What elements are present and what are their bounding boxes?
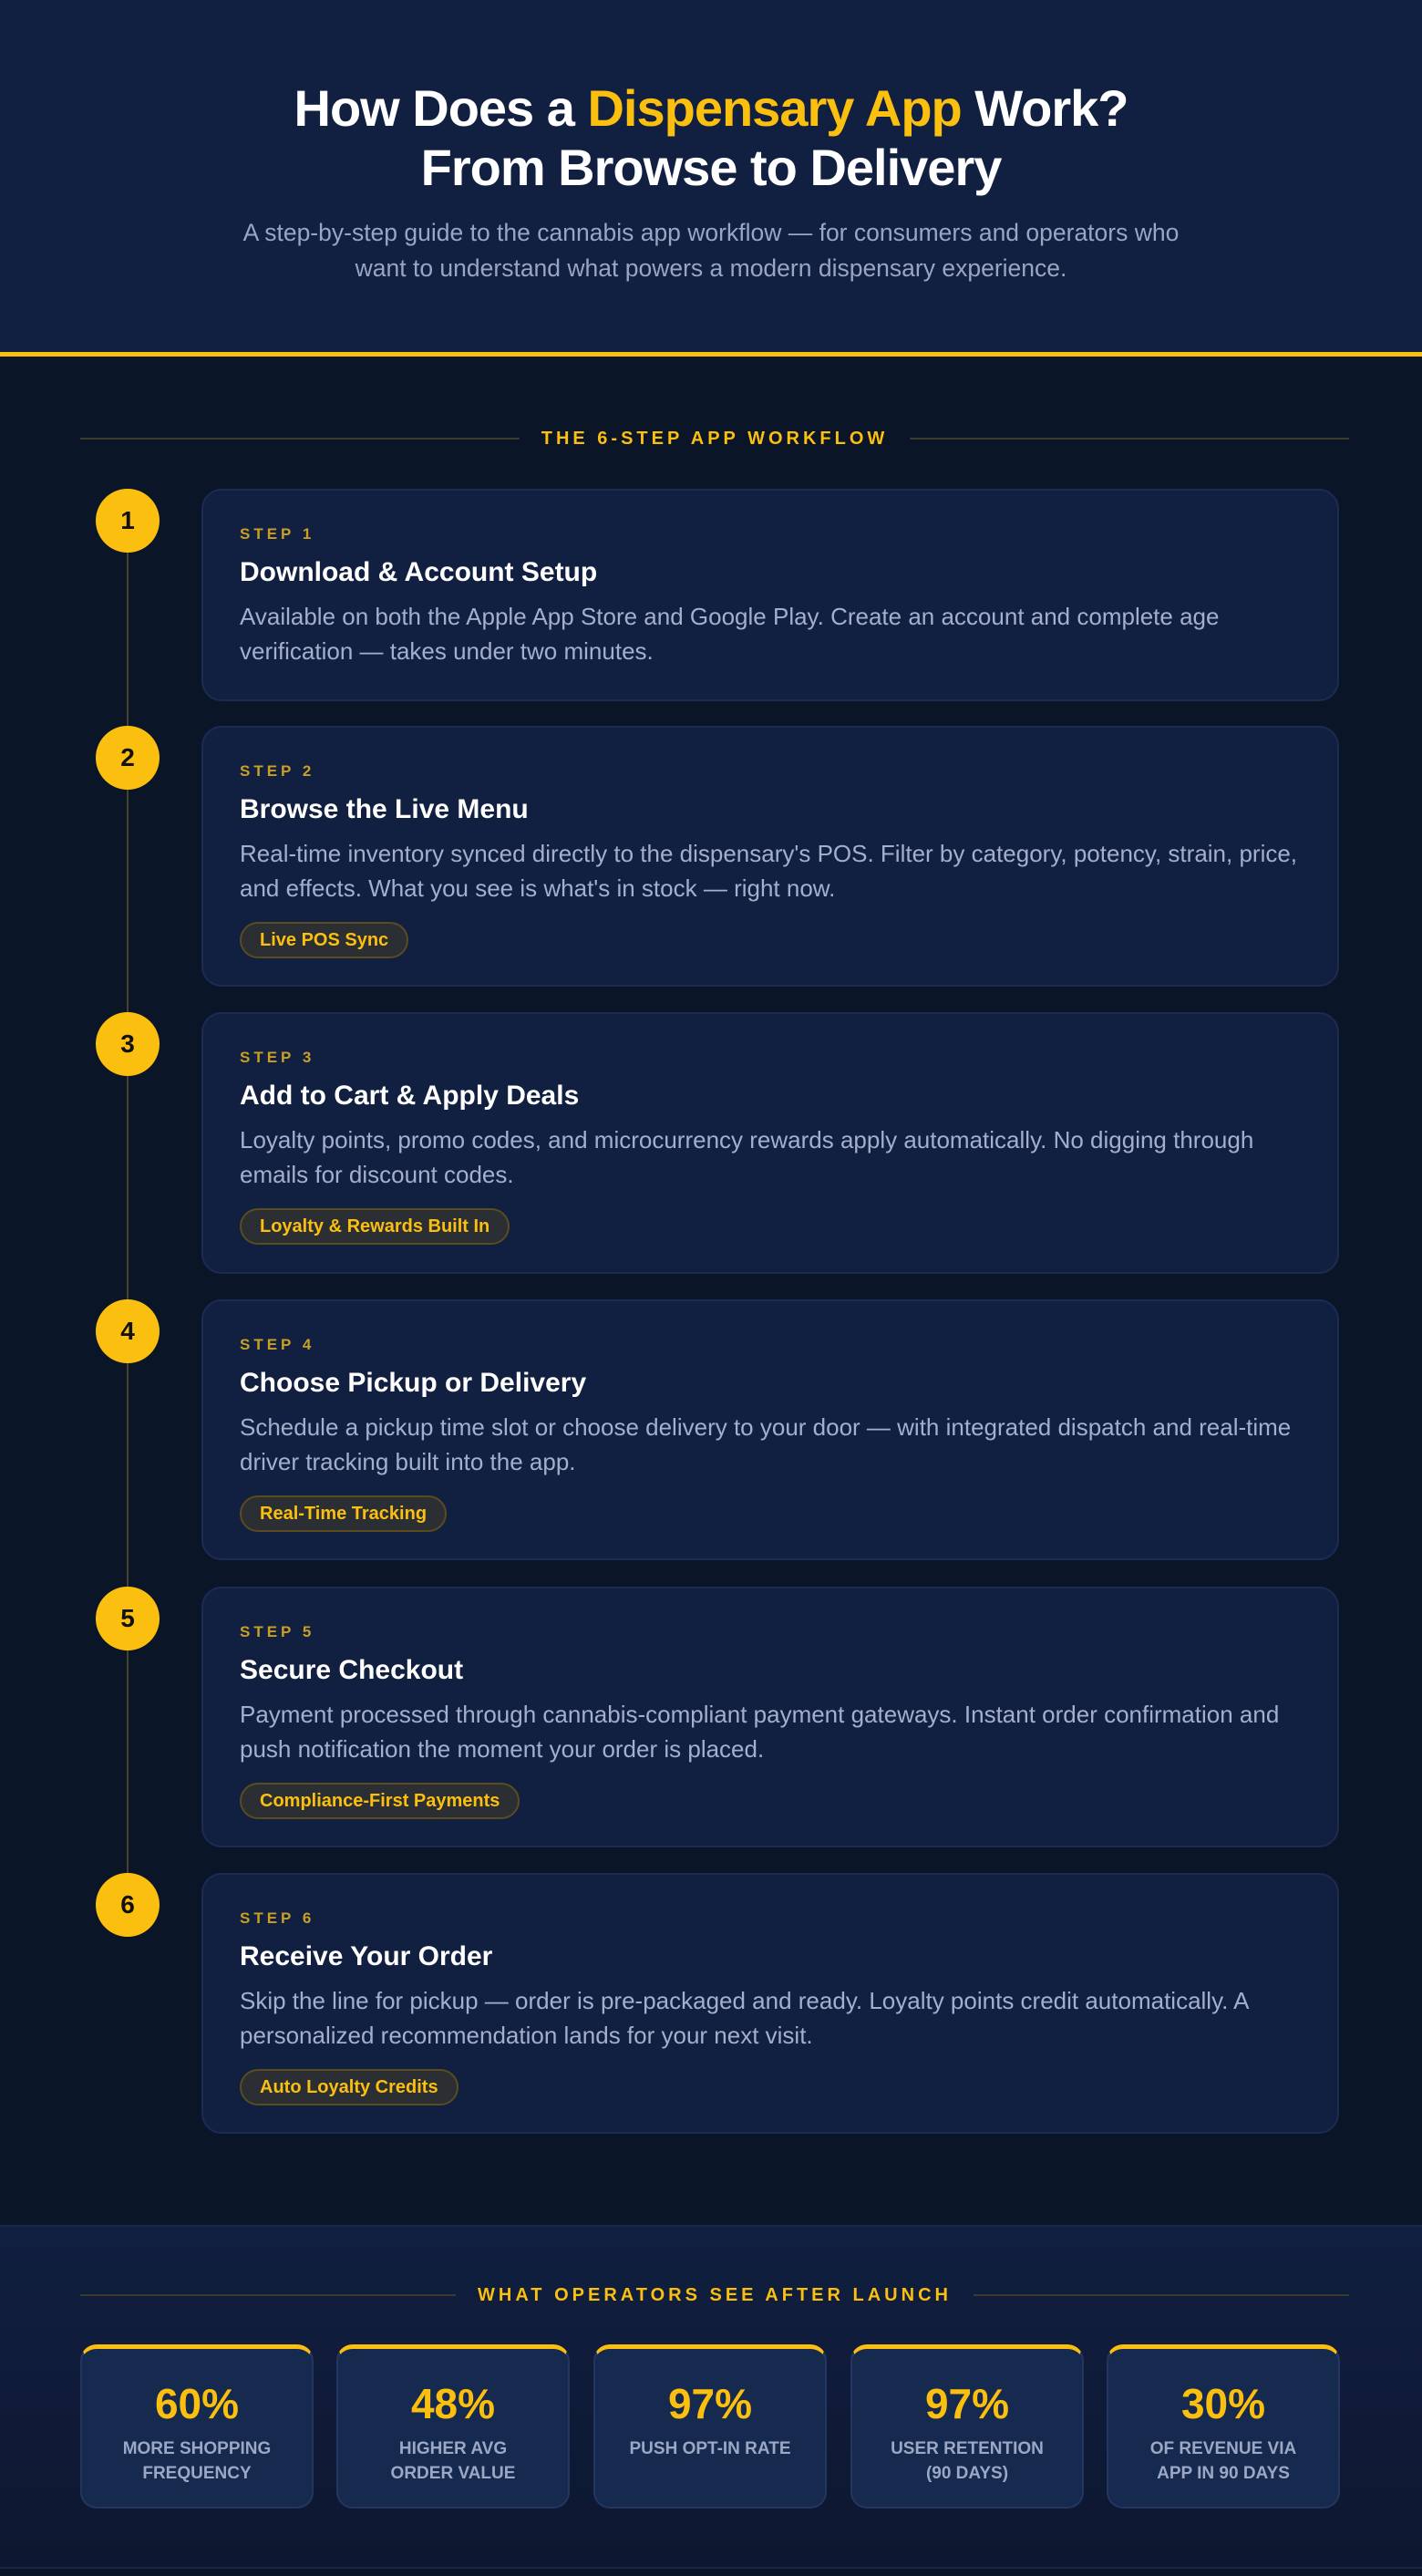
step 2 card: Browse the Live Menu <box>240 794 529 824</box>
stat 1: MORE SHOPPING <box>123 2439 271 2458</box>
step 5 card: STEP 5 <box>240 1623 314 1640</box>
step 2 circle <box>96 726 160 790</box>
section heading: workflow: THE 6-STEP APP WORKFLOW <box>541 429 888 449</box>
step 2 card: STEP 2 <box>240 762 314 780</box>
stats band <box>0 2225 1422 2569</box>
stat 4: USER RETENTION <box>891 2439 1044 2458</box>
step 6 card: Receive Your Order <box>240 1941 492 1971</box>
step 4 card: Schedule a pickup time slot or choose delivery to your door — with integrated dispatch and real-time driver tracking built into the app. <box>240 1413 1291 1475</box>
step 3 card: Loyalty & Rewards Built In <box>260 1216 489 1236</box>
stat 3: 97% <box>668 2380 752 2427</box>
header <box>0 0 1422 357</box>
step 5 card: Payment processed through cannabis-compliant payment gateways. Instant order confirmation and push notification the moment your order is placed. <box>240 1701 1279 1763</box>
step 6 card: Auto Loyalty Credits <box>260 2077 438 2097</box>
stat 5 <box>1107 2344 1340 2509</box>
stat 5: OF REVENUE VIA <box>1150 2439 1296 2458</box>
step 3 card: Loyalty points, promo codes, and microcurrency rewards apply automatically. No digging through emails for discount codes. <box>240 1126 1253 1188</box>
step 2 card: Live POS Sync <box>260 930 388 950</box>
stat 3 <box>593 2344 827 2509</box>
step 2 card <box>201 726 1339 987</box>
stat 5: APP IN 90 DAYS <box>1157 2464 1290 2483</box>
step 2 circle: 2 <box>120 743 135 771</box>
stat 2: HIGHER AVG <box>399 2439 507 2458</box>
title: From Browse to Delivery <box>421 139 1001 196</box>
step 4 card: STEP 4 <box>240 1336 314 1353</box>
step 6 card <box>201 1873 1339 2134</box>
step 5 circle: 5 <box>120 1604 135 1632</box>
step 6 circle: 6 <box>120 1890 135 1919</box>
step 5 card: Secure Checkout <box>240 1655 463 1685</box>
stat 3: PUSH OPT-IN RATE <box>629 2439 791 2458</box>
step 5 card <box>201 1587 1339 1847</box>
step 5 circle <box>96 1587 160 1650</box>
stat 4: (90 DAYS) <box>926 2464 1008 2483</box>
step 3 card: STEP 3 <box>240 1049 314 1066</box>
stat 2: ORDER VALUE <box>391 2464 515 2483</box>
step 3 card <box>201 1012 1339 1274</box>
subtitle <box>242 219 1179 282</box>
step 1 card: Download & Account Setup <box>240 557 597 587</box>
title <box>294 79 1128 196</box>
step 5 card: Compliance-First Payments <box>260 1791 500 1811</box>
step 3 card: Add to Cart & Apply Deals <box>240 1081 579 1111</box>
step 4 circle <box>96 1299 160 1363</box>
stat 5: 30% <box>1181 2380 1265 2427</box>
step 1 card <box>201 489 1339 701</box>
step 3 circle: 3 <box>120 1029 135 1058</box>
step 4 card <box>201 1299 1339 1560</box>
step 6 card: STEP 6 <box>240 1909 314 1927</box>
stat 2 <box>336 2344 570 2509</box>
stat 4 <box>850 2344 1084 2509</box>
subtitle: want to understand what powers a modern dispensary experience. <box>356 254 1066 282</box>
step 4 card: Real-Time Tracking <box>260 1504 427 1524</box>
step 1 circle <box>96 489 160 553</box>
stat 1: 60% <box>155 2380 239 2427</box>
step 4 card: Choose Pickup or Delivery <box>240 1368 586 1398</box>
stat 1 <box>80 2344 314 2509</box>
section heading: results: WHAT OPERATORS SEE AFTER LAUNCH <box>478 2285 952 2305</box>
stat 1: FREQUENCY <box>142 2464 252 2483</box>
step 1 circle: 1 <box>120 506 135 534</box>
step 2 card: Real-time inventory synced directly to the dispensary's POS. Filter by category, potency, strain, price, and effects. What you see is what's in stock — right now. <box>240 840 1297 902</box>
timeline line <box>127 553 129 1875</box>
step 1 card: STEP 1 <box>240 525 314 543</box>
step 4 circle: 4 <box>120 1317 135 1345</box>
stat 4: 97% <box>925 2380 1009 2427</box>
subtitle: A step-by-step guide to the cannabis app workflow — for consumers and operators who <box>243 219 1179 246</box>
step 3 circle <box>96 1012 160 1076</box>
stat 2: 48% <box>411 2380 495 2427</box>
step 6 circle <box>96 1873 160 1937</box>
step 6 card: Skip the line for pickup — order is pre-packaged and ready. Loyalty points credit automatically. A personalized recommendation lands for your next visit. <box>240 1987 1248 2049</box>
step 1 card: Available on both the Apple App Store and Google Play. Create an account and complete age verification — takes under two minutes. <box>240 603 1219 665</box>
title: How Does a Dispensary App Work? <box>294 79 1128 137</box>
